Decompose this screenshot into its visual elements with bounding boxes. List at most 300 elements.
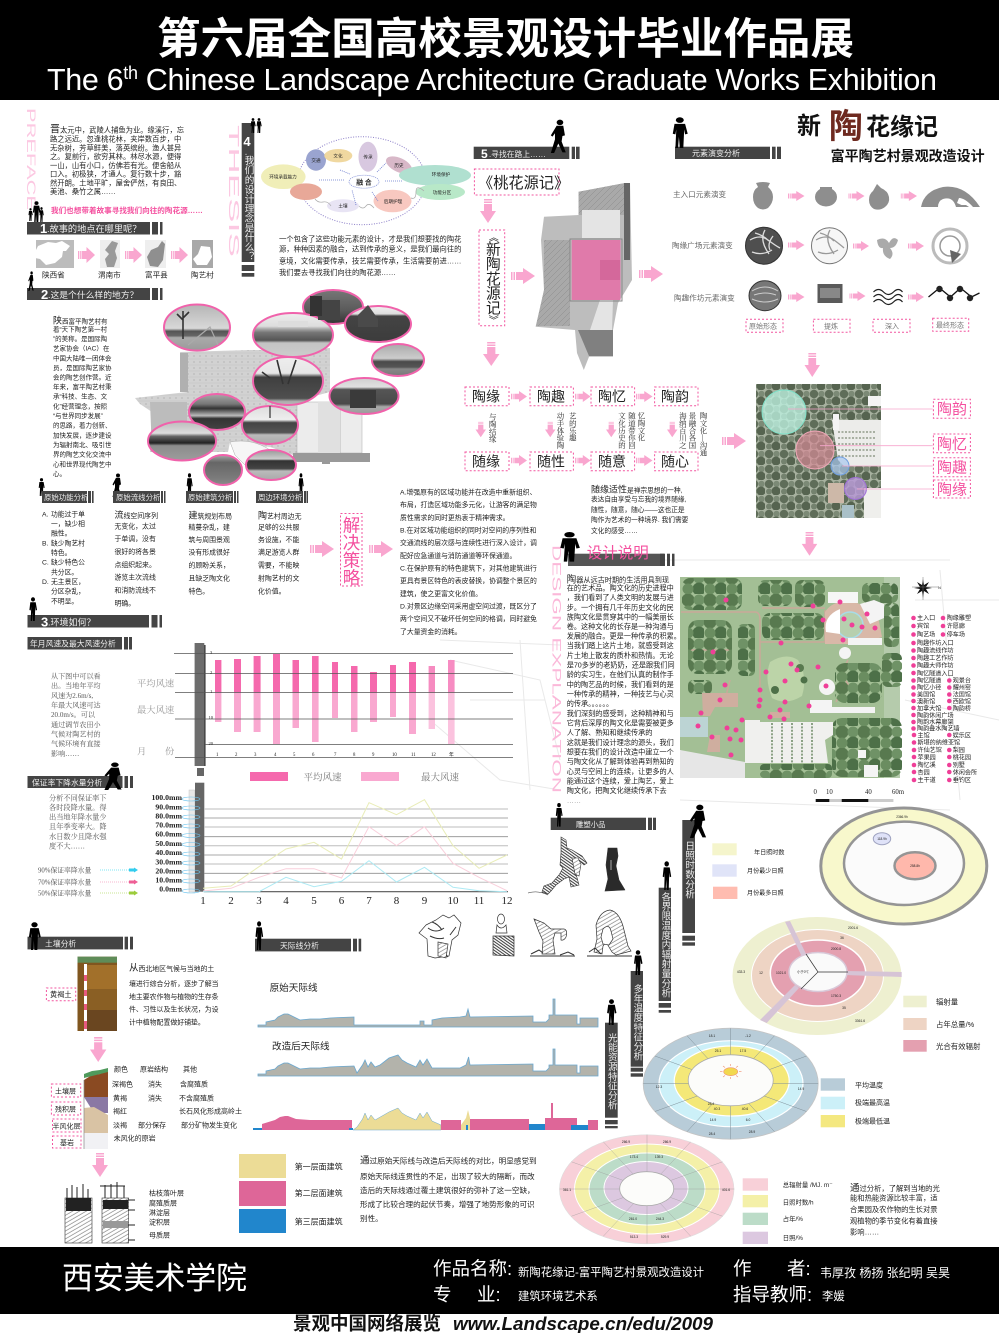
analysis column: circulation: 点组织起来。 (114, 560, 156, 569)
month ticks: 11 (474, 895, 484, 907)
axis numbers: 3 (210, 650, 213, 655)
soil type tag: 黄褐土 (50, 990, 72, 999)
wind bar chart (137, 643, 513, 776)
grid lines (174, 654, 513, 758)
text: about fuping: 着“天下陶艺第一村 (53, 324, 108, 334)
chart: temperature rings: 12.3 (656, 1085, 662, 1089)
preface poem text: 一山，山有小口，仿佛若有光。便舍船从 (50, 161, 181, 170)
panel: preface (24, 108, 203, 222)
sculpture heading bar (551, 803, 656, 830)
chart: radiation rings: 2001.6 (848, 926, 858, 930)
vertical heading bar: 4 (243, 134, 251, 149)
legend: sunshine hours (712, 843, 784, 899)
school name: 西安美术学院 (62, 1261, 247, 1296)
chart: solar rings: 244.3 (656, 1217, 664, 1221)
bottom row tags: 随缘 (472, 454, 500, 470)
chart: solar rings: 266.9 (663, 1140, 671, 1144)
soil property table: 部分保存 (138, 1120, 166, 1130)
legend left labels: 陶趣工艺作坊 (917, 654, 954, 662)
section bar 1: 1 (40, 221, 47, 236)
strategy text: C.在保护原有的特色建筑下，对其他建筑进行 (400, 564, 537, 572)
vertical explanatory text: 文化历史的 (617, 412, 626, 450)
sketches of sculptures (419, 910, 632, 958)
explanation text: 陶器从远古时期的生活用具到现 (567, 574, 669, 586)
analysis column: architecture: 且缺乏陶文化 (188, 574, 230, 582)
soil text: 壤进行综合分析，逐步了解当 (129, 979, 219, 988)
chart: radiation rings: 12 (759, 971, 763, 975)
work credits: 作 (733, 1258, 752, 1279)
vertical explanatory text: 海纳百川之 (678, 412, 687, 450)
soil property table: 消失 (148, 1094, 162, 1102)
legend right labels: 许愿廊 (947, 622, 965, 630)
skyline legend: 第三层面建筑 (295, 1216, 343, 1226)
legend left labels: 陶忆隧道入口 (917, 669, 954, 677)
legend left labels: 美国馆 (917, 691, 935, 699)
work credits: 指导教师: (733, 1284, 812, 1305)
legend: temperature: 平均温度 (855, 1080, 883, 1090)
soil property table: 颜色 (114, 1064, 128, 1074)
legend left labels: 主入口 (917, 614, 935, 622)
grid (204, 809, 508, 882)
text: about fuping: 年来，富平陶艺村秉 (53, 382, 112, 391)
concept box vertical: 新陶花源记 (484, 241, 500, 315)
analysis column: surroundings: 陶艺村周边无 (258, 510, 301, 520)
tree zones (682, 578, 902, 778)
strategy text: 两个空间又不破坏任何空间的格调，同时避免 (400, 614, 537, 623)
legend right labels: 休闲会所 (953, 768, 977, 776)
header band (0, 0, 999, 100)
analysis column: circulation: 明确。 (114, 598, 135, 608)
wind text: 气候对陶艺村的 (51, 730, 101, 738)
section 5 path (474, 120, 663, 370)
text: about fuping: 心。 (53, 470, 66, 478)
place labels: 渭南市 (98, 270, 121, 280)
skyline legend (239, 1154, 343, 1233)
analysis column: circulation: 于单调，没有 (114, 534, 156, 543)
precipitation text: 出当地年降水量少 (49, 812, 107, 822)
explanation text: 这就是我们设计理念的源头，我们 (567, 738, 674, 747)
stage tags (746, 318, 969, 332)
chart: sunshine rings: 2366.9h (896, 815, 908, 819)
chart: solar rings: 513.3 (630, 1235, 638, 1239)
function diagram: 融 合 (356, 178, 372, 186)
analysis column: architecture: 特色。 (188, 586, 209, 596)
preface poem text: 之。复前行，欲穷其林。林尽水源，便得 (50, 152, 181, 161)
explanation text: 片土地上散发的质朴和热情。无论 (567, 651, 674, 660)
precipitation text: 分析不同保证率下 (49, 794, 107, 802)
vertical explanatory text: 随道带你回 (627, 412, 636, 450)
axis numbers (208, 650, 214, 746)
section bar 1 (27, 221, 162, 236)
original skyline (258, 999, 598, 1027)
month ticks: 1 (200, 895, 206, 907)
top row tags (465, 387, 698, 406)
scale bar: 40 (865, 789, 872, 796)
chart: radiation rings (732, 917, 902, 1035)
legend left labels: 陶艺场 (917, 631, 935, 639)
legend: radiation: 辐射量 (936, 998, 959, 1006)
concept text: 源，种种因素的融合，达到传承的意义，是我们最向往的 (279, 244, 461, 254)
soil property table: 其他 (183, 1064, 197, 1074)
down arrow (480, 199, 496, 223)
soil profile sketches (65, 1182, 135, 1243)
stage tags: 深入 (885, 322, 899, 330)
preface poem text: 路之远近。忽逢桃花林，夹岸数百步，中 (50, 134, 181, 144)
month labels: 3 (254, 753, 257, 758)
title english: The 6 (47, 63, 124, 97)
axis numbers: 20 (208, 741, 214, 746)
soil text: 件、习性以及生长状况，为设 (129, 1004, 219, 1014)
soil text: 计中植物配置做好铺垫。 (129, 1018, 205, 1026)
strategy text: B.在对区域功能组织的同时对空间的序列性和 (400, 526, 537, 534)
compass (912, 577, 941, 600)
analysis column: function: 不明显。 (51, 598, 78, 606)
axis row labels: 平均风速 (137, 678, 175, 690)
month labels: 12 (431, 753, 436, 758)
analysis column: function: 分区杂乱， (51, 586, 85, 596)
analysis column: circulation: 和消防流线不 (114, 586, 156, 594)
design explanation panel (550, 532, 683, 805)
analysis column: circulation: 原始流线分析 (116, 493, 161, 502)
chart: radiation rings: 36 (840, 936, 844, 940)
text: about fuping: 加快发展，逐步建设 (53, 430, 112, 440)
soil profile labels: 腐殖质层 (149, 1198, 177, 1208)
legend right labels: 陶韵桥 (953, 704, 971, 712)
month ticks: 10 (448, 895, 459, 907)
soil heading bar (28, 922, 133, 950)
down arrow to aerial (804, 353, 820, 377)
place labels: 陶艺村 (191, 270, 214, 280)
soil text: 从西北地区气候与当地的土 (129, 963, 214, 974)
precipitation heading bar: 保证率下降水量分析 (32, 778, 102, 788)
month labels: 9 (372, 753, 375, 758)
chart: radiation rings: 1750.3 (831, 994, 841, 998)
analysis column: function: 共分区。 (51, 568, 78, 576)
vertical heading: temperature (631, 950, 643, 1077)
round plaza (825, 592, 884, 645)
zone tags: 陶趣 (937, 460, 967, 476)
vertical explanatory text: 景融合各国 (688, 412, 697, 450)
precipitation legend: 90%保证率降水量 (38, 866, 91, 874)
preface poem text: 然开朗。土地平旷，屋舍俨然，有良田、 (50, 178, 181, 188)
chart: radiation rings: 1021.0 (776, 971, 786, 975)
heading bar: 设计说明 (587, 544, 649, 562)
chart: temperature rings: 28.4 (708, 1102, 714, 1106)
legend left labels: 陶趣大师作坊 (917, 662, 954, 670)
legend right labels: 陶缘雕塑 (947, 614, 971, 622)
wind chart legend: 最大风速 (421, 772, 460, 784)
explanation text: 心灵与空间上的连续，让更多的人 (567, 767, 674, 776)
photo ellipses (148, 290, 424, 485)
legend: solar: 日照/% (783, 1234, 803, 1242)
layer tags: 基岩 (60, 1138, 74, 1147)
month ticks: 7 (366, 895, 372, 907)
month labels: 11 (411, 753, 416, 758)
soil layers (84, 1068, 108, 1149)
section bar 2: .这是个什么样的地方？ (48, 289, 138, 300)
analysis column: surroundings: 周边环境分析 (258, 493, 303, 502)
value labels: 50.0mm (155, 839, 182, 848)
concept box vertical: 《 (486, 232, 498, 242)
analysis column: function: 功能过于单 (51, 510, 85, 518)
scale bar: 0 (814, 789, 818, 796)
text: about fuping: 为辐射南北、吸引世 (53, 440, 112, 449)
function diagram: 传承 (363, 154, 373, 160)
chart: solar rings: 529.9 (661, 1235, 669, 1239)
element evolution panel (672, 117, 980, 332)
function diagram (261, 137, 471, 225)
soil photo (78, 957, 117, 1031)
analysis column: function: C. (42, 560, 49, 566)
analysis column: function: 缺少陶艺村 (51, 538, 85, 548)
faint background linework (430, 560, 999, 810)
chart: temperature rings: 25.1 (715, 1049, 721, 1053)
skyline text: 造后的天际线通过覆土建筑很好的弥补了这一空缺， (360, 1185, 535, 1195)
skyline legend: 第一层面建筑 (295, 1162, 343, 1172)
analysis column: architecture: 没有形成很好 (188, 548, 230, 556)
legend: radiation: 占年总量/% (936, 1020, 975, 1029)
analysis column: circulation: 流线空间序列 (114, 510, 158, 520)
explanation text: 卷。这种文化的长存是一种沟通与 (567, 622, 674, 631)
soil property table: 部分矿物发生变化 (181, 1120, 237, 1130)
chart: solar rings: 266.9 (622, 1140, 630, 1144)
month ticks: 5 (311, 895, 317, 907)
vertical heading: temperature: 多年温度特征分析 (631, 983, 643, 1062)
function diagram: 历史 (394, 162, 404, 169)
function diagram: 功能分区 (433, 189, 452, 196)
precipitation text: 水日数少且降水强 (49, 832, 107, 841)
vertical explanatory text (488, 412, 708, 458)
map: weinan (145, 240, 166, 268)
credit values: 韦厚孜 杨扬 张纪明 吴昊 (820, 1265, 950, 1280)
chart: temperature rings: 40.6 (742, 1107, 748, 1111)
month ticks: 3 (256, 895, 262, 907)
legend right labels: 西欧馆 (953, 697, 971, 705)
analysis column: circulation: 游览主次流线 (114, 572, 156, 582)
value labels: 0.0mm (159, 885, 182, 894)
70% line (203, 827, 507, 891)
axis numbers: 2 (210, 670, 212, 675)
text: suiyuan: 表达自由享受与忘我的境界随缘, (591, 494, 687, 504)
month labels: 10 (392, 753, 397, 758)
vertical heading: sunshine hours (682, 805, 706, 946)
silhouette family (28, 201, 44, 222)
vertical explanatory text: 艺的乐趣 (568, 412, 577, 443)
vertical explanatory text: 忆陶文化 (637, 412, 646, 443)
strategy text: 了大量资金的消耗。 (400, 627, 462, 636)
wind text: 20.0m/s。可以 (51, 710, 96, 719)
preface poem text: 无杂树，芳草鲜美，落英缤纷。渔人甚异 (50, 144, 181, 152)
explanation text: 龄的实习生，在他们认真的制作手 (567, 670, 674, 679)
layer tags (51, 1084, 81, 1148)
lawn base (680, 577, 900, 778)
legend right labels: 梨园 (953, 746, 965, 754)
chart: solar rings: 361.1 (563, 1188, 571, 1192)
legend: sunshine hours: 年日照时数 (754, 848, 784, 856)
logo main characters: 新 (797, 113, 821, 140)
month labels: 年 (449, 751, 454, 758)
explanation text: 我们深刻的感受到，这种精神和与 (567, 709, 674, 718)
section 4 concept (225, 118, 471, 277)
scale bar (814, 789, 905, 802)
tube rings (182, 797, 200, 893)
vertical explanatory text: 与陶结缘 (488, 413, 497, 443)
master plan legend (911, 614, 977, 784)
zone circles (762, 390, 866, 500)
soil property table: 未风化的原岩 (114, 1134, 156, 1142)
text: solar conclusion: 观植物的季节变化有着直接 (850, 1216, 938, 1225)
down arrow to master plan (802, 532, 817, 556)
text: solar conclusion: 通过分析，了解到当地的光 (850, 1183, 940, 1194)
strategy text: D.对景区边缘空间采用虚空间过渡，既区分了 (400, 602, 537, 610)
source box (474, 169, 569, 195)
explanation text: 能通过这个连续，爱上陶艺，爱上 (567, 776, 674, 786)
bottom exhibition line (293, 1313, 714, 1333)
chart: temperature rings: 17.5 (740, 1049, 746, 1053)
gray site plan (135, 348, 370, 470)
vertical word: DESIGN EXPLANATION (550, 545, 564, 793)
analysis column: surroundings: 化价值。 (258, 586, 286, 596)
month ticks: 8 (394, 895, 400, 907)
tan plazas (702, 693, 790, 752)
precipitation text: 度不大…… (49, 842, 85, 850)
soil property table: 淡褐 (113, 1120, 127, 1130)
preface poem text: 美池、桑竹之属…… (50, 187, 116, 196)
work credits: 者: (787, 1258, 811, 1279)
white small plazas (810, 647, 878, 777)
credit values: 新陶花缘记-富平陶艺村景观改造设计 (518, 1265, 704, 1279)
wind text: 从下图中可以看 (51, 672, 101, 680)
strategy text: 配好应急通道与消防通道等环保通道。 (400, 551, 516, 560)
entry road (680, 750, 745, 778)
skyline text: 通过原始天际线与改造后天际线的对比，明显感觉到 (360, 1156, 537, 1166)
function diagram: 环境承载能力 (269, 174, 297, 180)
vertical heading bar: .我们的设计理念是什么？ (242, 153, 254, 261)
section bar 3: .环境如何？ (48, 616, 96, 628)
text: about fuping: 承“科技、生态、文 (53, 392, 108, 400)
analysis column: function: 无主景区， (51, 577, 85, 586)
vertical word: PREFACE: PREFACE (24, 108, 38, 210)
title english: th (123, 63, 138, 83)
legend left labels: 澳新馆 (917, 697, 935, 705)
source box: 《桃花源记》 (478, 175, 569, 192)
down arrow (90, 1037, 106, 1062)
analysis column: function: 融性。 (51, 528, 71, 538)
layer tags: 残积层 (55, 1104, 76, 1114)
aerial with zones (756, 384, 970, 518)
heading bar (474, 120, 580, 161)
legend left labels: 苹果园 (918, 753, 936, 761)
legend left labels: 陶忆溪 (918, 761, 936, 769)
90% line (203, 861, 507, 892)
row 2 disc icons (746, 227, 967, 264)
skyline analysis panel (239, 921, 598, 1233)
month labels: 1 (216, 753, 219, 758)
analysis column: circulation: 无变化，太过 (114, 522, 156, 530)
credit values: 李媛 (822, 1289, 845, 1303)
legend: solar: 总辐射量 /MJ. m⁻ (783, 1180, 833, 1189)
legend: sunshine hours: 月份最少日照 (747, 867, 784, 875)
analysis column: architecture: 筑与周围景观 (188, 535, 230, 544)
map: shaanxi (100, 240, 120, 268)
month labels: 6 (312, 753, 315, 758)
section bar 3: 3 (41, 614, 48, 630)
max speed bars (215, 692, 455, 744)
down arrow (92, 1153, 108, 1177)
text: about fuping: ”的美称。是国际陶 (53, 334, 108, 343)
soil property table: 长石风化形成高岭土 (179, 1106, 242, 1116)
axis row labels (137, 678, 175, 758)
section bar 3 (28, 597, 162, 630)
paths (681, 608, 848, 702)
soil profile labels: 淋淀层 (149, 1208, 170, 1217)
month ticks: 4 (283, 895, 289, 907)
precipitation text: 且年季变率大。降 (49, 822, 107, 831)
zone tags: 陶缘 (937, 482, 967, 498)
vertical heading: radiation: 各界限温度内辐射量分析 (659, 891, 671, 998)
vertical explanatory text: 陶文化—沟通 (699, 412, 708, 458)
chart: sunshine rings: 258.8h (910, 864, 920, 868)
wind text: 影响…… (51, 749, 79, 758)
bottom row tags (465, 452, 698, 471)
legend: temperature: 极端最低温 (855, 1116, 890, 1126)
precipitation legend: 70%保证率降水量 (38, 878, 91, 886)
wind text: 风速为2.6m/s, (51, 691, 93, 700)
text: suiyuan: 陶作为艺术的一种境界. 我们需要 (591, 515, 689, 524)
legend: temperature: 极端最高温 (855, 1098, 890, 1107)
precipitation line chart (151, 783, 512, 907)
value labels: 90.0mm (155, 802, 182, 811)
row labels: 陶趣作坊元素演变 (674, 292, 735, 302)
concept box vertical (479, 230, 505, 326)
soil property table: 褐红 (113, 1106, 127, 1116)
mound (767, 656, 808, 702)
strategy text: 更具有景区特色的表皮替换，协调整个景区的 (400, 576, 537, 585)
top row tags: 陶缘 (472, 388, 500, 404)
legend left labels: 陶韵水幕廊架 (917, 718, 954, 726)
analysis column: surroundings: 射陶艺村的文 (258, 574, 299, 582)
vertical arrows (476, 422, 678, 437)
value labels: 10.0mm (155, 876, 182, 885)
legend left labels: 杏园 (918, 768, 930, 776)
value labels: 20.0mm (155, 866, 182, 875)
strategy text: 布局，打造区域功能多元化，让游客的满足物 (400, 500, 537, 509)
soil property table: 深褐色 (112, 1080, 133, 1088)
title chinese: 第六届全国高校景观设计毕业作品展 (157, 16, 854, 64)
analysis column: function (39, 478, 94, 606)
vertical word: THESIS: THESIS (225, 125, 242, 257)
function diagram: 文化 (333, 152, 343, 160)
chart: solar rings: 261.0 (629, 1217, 637, 1221)
row labels: 主入口元素演变 (673, 189, 727, 199)
bottom row tags: 随意 (598, 454, 626, 470)
stage tags: 最终形态 (936, 320, 964, 330)
explanation text: 当我们踏上这片土地，就感受到这 (567, 641, 674, 650)
chart: temperature rings (643, 1028, 818, 1139)
text: solar conclusion: 能和热能资源比较丰富，适 (850, 1194, 938, 1202)
chart: temperature rings: 28.4 (709, 1132, 715, 1136)
logo main characters: 花缘记 (866, 114, 938, 141)
legend: sunshine hours: 月份最多日照 (747, 889, 784, 897)
section bar 2 (27, 271, 162, 302)
chart: solar rings: 173.4 (630, 1155, 638, 1159)
vertical heading: solar energy: 光能资源特征分析 (606, 1032, 618, 1111)
heading bar (673, 117, 781, 159)
soil heading bar: 土壤分析 (45, 938, 76, 948)
layer tags: 半风化层 (52, 1122, 80, 1130)
legend: radiation (903, 996, 981, 1052)
value labels: 100.0mm (151, 793, 182, 802)
